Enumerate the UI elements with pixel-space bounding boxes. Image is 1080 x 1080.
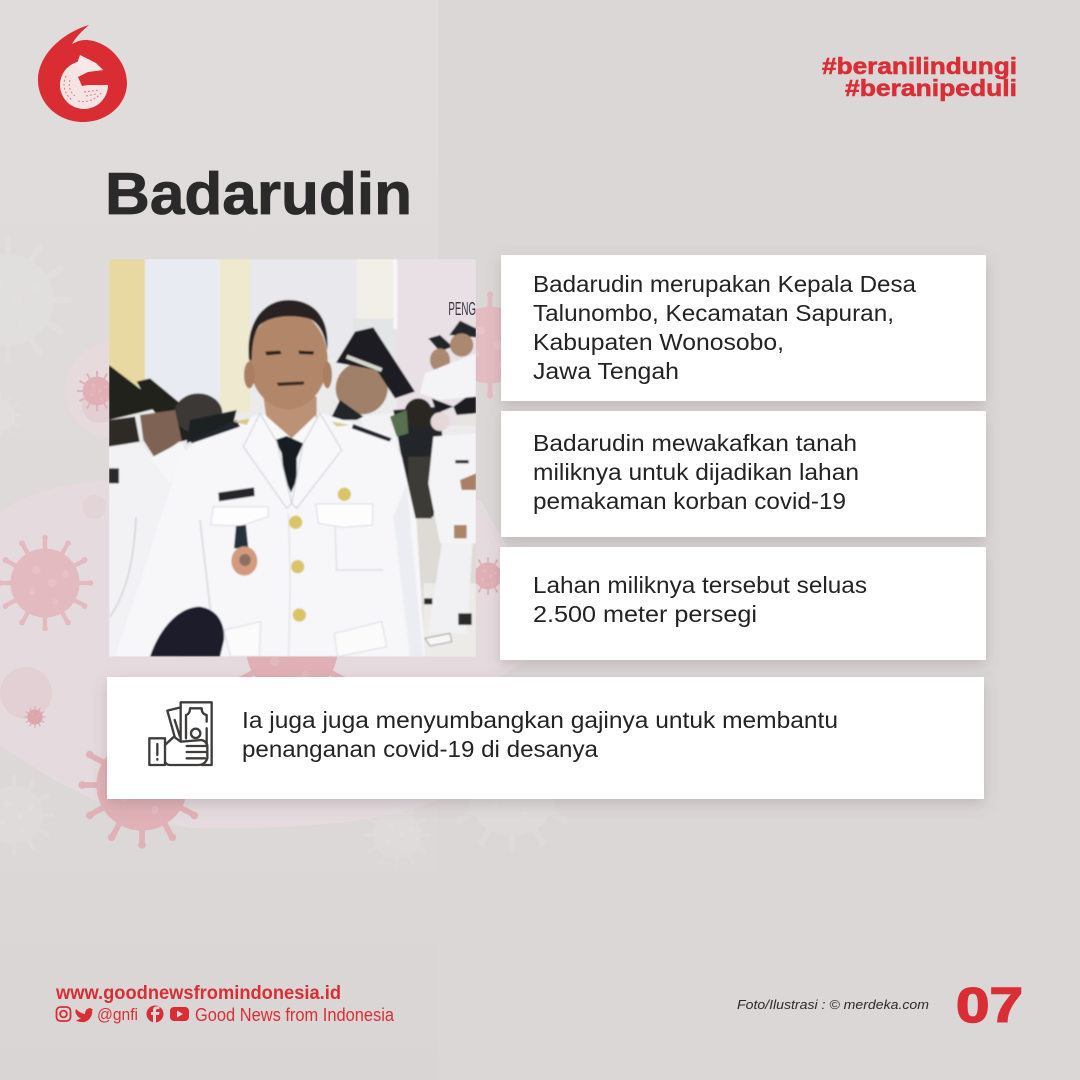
buttons: [289, 516, 302, 529]
info card: land size: [500, 547, 986, 660]
photo credit: Foto/Ilustrasi : © merdeka.com: [737, 997, 929, 1012]
info card: identity: Badarudin merupakan Kepala Desa: [533, 271, 916, 297]
info card: salary donation: penanganan covid-19 di desanya: [242, 736, 598, 762]
info card: identity: Talunombo, Kecamatan Sapuran,: [533, 300, 894, 326]
info card: land donation: pemakaman korban covid-19: [533, 488, 846, 514]
photo: village head in white uniform: PENG: [448, 298, 476, 319]
info card: salary donation: Ia juga juga menyumbangkan gajinya untuk membantu: [242, 707, 838, 733]
icon: facebook: [146, 1006, 164, 1023]
info card: land donation: miliknya untuk dijadikan lahan: [533, 459, 859, 485]
info card: land donation: [501, 411, 986, 537]
hashtags: #beranilindungi: [822, 53, 1017, 79]
neck and shirt: [263, 397, 317, 440]
pockets and tag: [211, 507, 268, 526]
logo emblem: eagle G: [60, 55, 112, 109]
title: Badarudin: [105, 161, 412, 227]
icon: instagram: [56, 1007, 70, 1021]
info card: salary donation: [107, 677, 984, 799]
icon: youtube: [170, 1007, 189, 1021]
page number: 07: [956, 979, 1023, 1033]
info card: identity: [501, 255, 986, 401]
medal: [234, 525, 248, 548]
info card: identity: Kabupaten Wonosobo,: [533, 329, 784, 355]
hashtags: #beranipeduli: [845, 75, 1017, 101]
black cap under arm: [150, 607, 224, 657]
info card: identity: Jawa Tengah: [533, 358, 679, 384]
info card: land size: Lahan miliknya tersebut seluas: [533, 572, 867, 598]
icon: hand holding money: [149, 702, 212, 765]
info card: land donation: Badarudin mewakafkan tanah: [533, 430, 857, 456]
head: [249, 311, 328, 409]
footer: website and social: [55, 983, 395, 1025]
virus decorations: [0, 236, 576, 869]
info card: land size: 2.500 meter persegi: [533, 601, 757, 627]
footer: website and social: @gnfi: [97, 1005, 138, 1024]
icon: twitter: [75, 1008, 93, 1022]
logo: [38, 25, 127, 122]
logo mark: red swirl: [38, 25, 127, 122]
footer: website and social: www.goodnewsfromindonesia.id: [55, 983, 341, 1004]
jacket: [170, 414, 425, 656]
photo: village head in white uniform: [109, 259, 476, 657]
hashtags: [822, 53, 1017, 101]
footer: website and social: Good News from Indonesia: [195, 1005, 395, 1025]
